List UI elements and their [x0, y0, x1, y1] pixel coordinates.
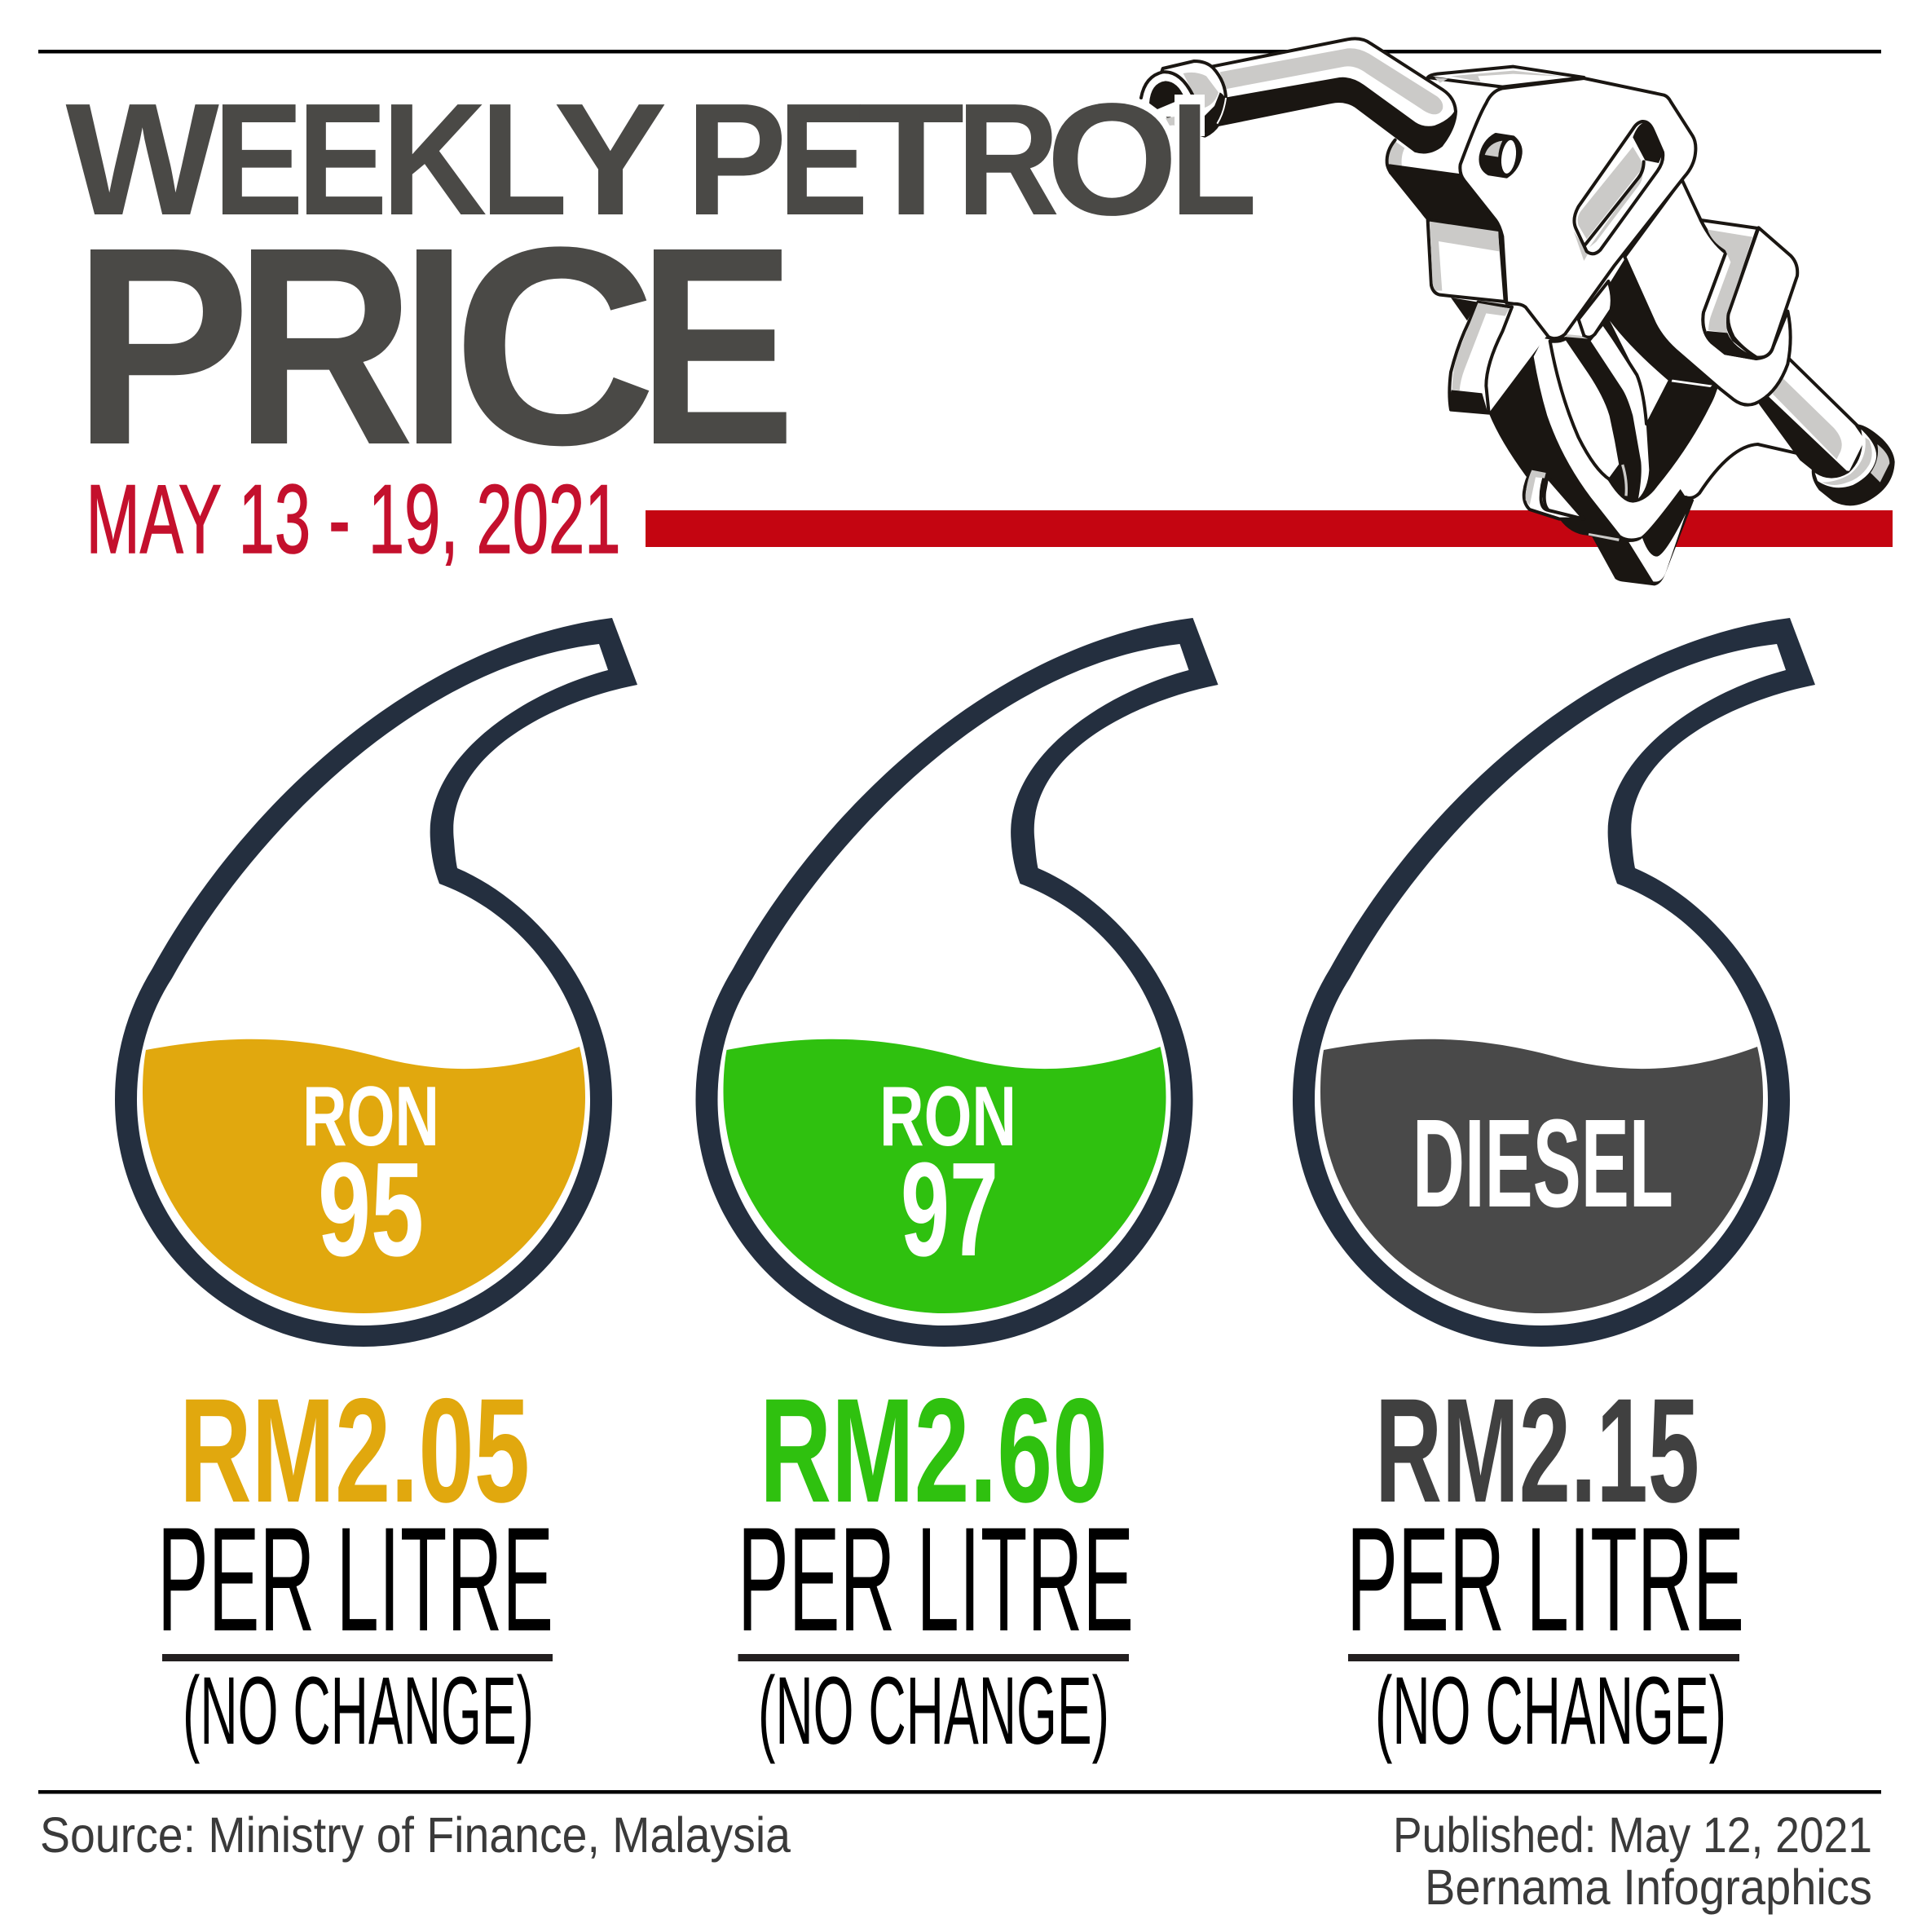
title: price: R	[235, 189, 415, 504]
title: weekly petrol: E	[778, 70, 868, 249]
title: weekly petrol: O	[1047, 70, 1179, 249]
title: weekly petrol: Y	[553, 70, 665, 249]
label: 97: 97	[901, 1135, 998, 1284]
title: price: C	[452, 189, 657, 504]
label: 95: 95	[318, 1135, 424, 1284]
date range: MAY 13 - 19, 2021	[86, 465, 621, 574]
label: RON: RON	[879, 1070, 1016, 1164]
title: weekly petrol: L	[480, 70, 567, 249]
title: price: P	[73, 189, 251, 504]
title: weekly petrol: P	[686, 70, 787, 249]
title: price: I	[400, 189, 468, 504]
title: weekly petrol: E	[297, 70, 387, 249]
published date: Published: May 12, 2021	[1393, 1807, 1872, 1863]
title: weekly petrol: T	[858, 70, 965, 249]
drop gauge: diesel	[1293, 618, 1815, 1347]
price: RM2.05: RM2.05	[179, 1367, 530, 1533]
drop gauge: RON 95	[115, 618, 637, 1347]
title: weekly petrol: L	[1170, 70, 1257, 249]
label: RON: RON	[302, 1070, 439, 1164]
panel: RON 97	[696, 618, 1218, 1765]
drop gauge: RON 97	[696, 618, 1218, 1347]
price: RM2.15: RM2.15	[1375, 1367, 1699, 1533]
per litre: PER LITRE	[738, 1496, 1134, 1662]
title: weekly petrol: R	[956, 70, 1060, 249]
red date bar	[646, 510, 1893, 547]
title: weekly petrol: E	[214, 70, 303, 249]
source credit: Source: Ministry of Finance, Malaysia	[40, 1807, 791, 1863]
panel: RON 95	[115, 618, 637, 1765]
price: RM2.60: RM2.60	[760, 1367, 1108, 1533]
no change note: (NO CHANGE)	[183, 1657, 534, 1765]
label: DIESEL: DIESEL	[1413, 1093, 1673, 1233]
title: weekly petrol: K	[381, 70, 487, 249]
per litre: PER LITRE	[157, 1496, 553, 1662]
title: weekly petrol: W	[65, 70, 219, 249]
icon: fuel pump nozzle	[1141, 38, 1893, 585]
panel: diesel	[1293, 618, 1815, 1765]
no change note: (NO CHANGE)	[758, 1657, 1109, 1765]
infographics credit: Bernama Infographics	[1425, 1859, 1872, 1915]
title: price: E	[638, 189, 796, 504]
